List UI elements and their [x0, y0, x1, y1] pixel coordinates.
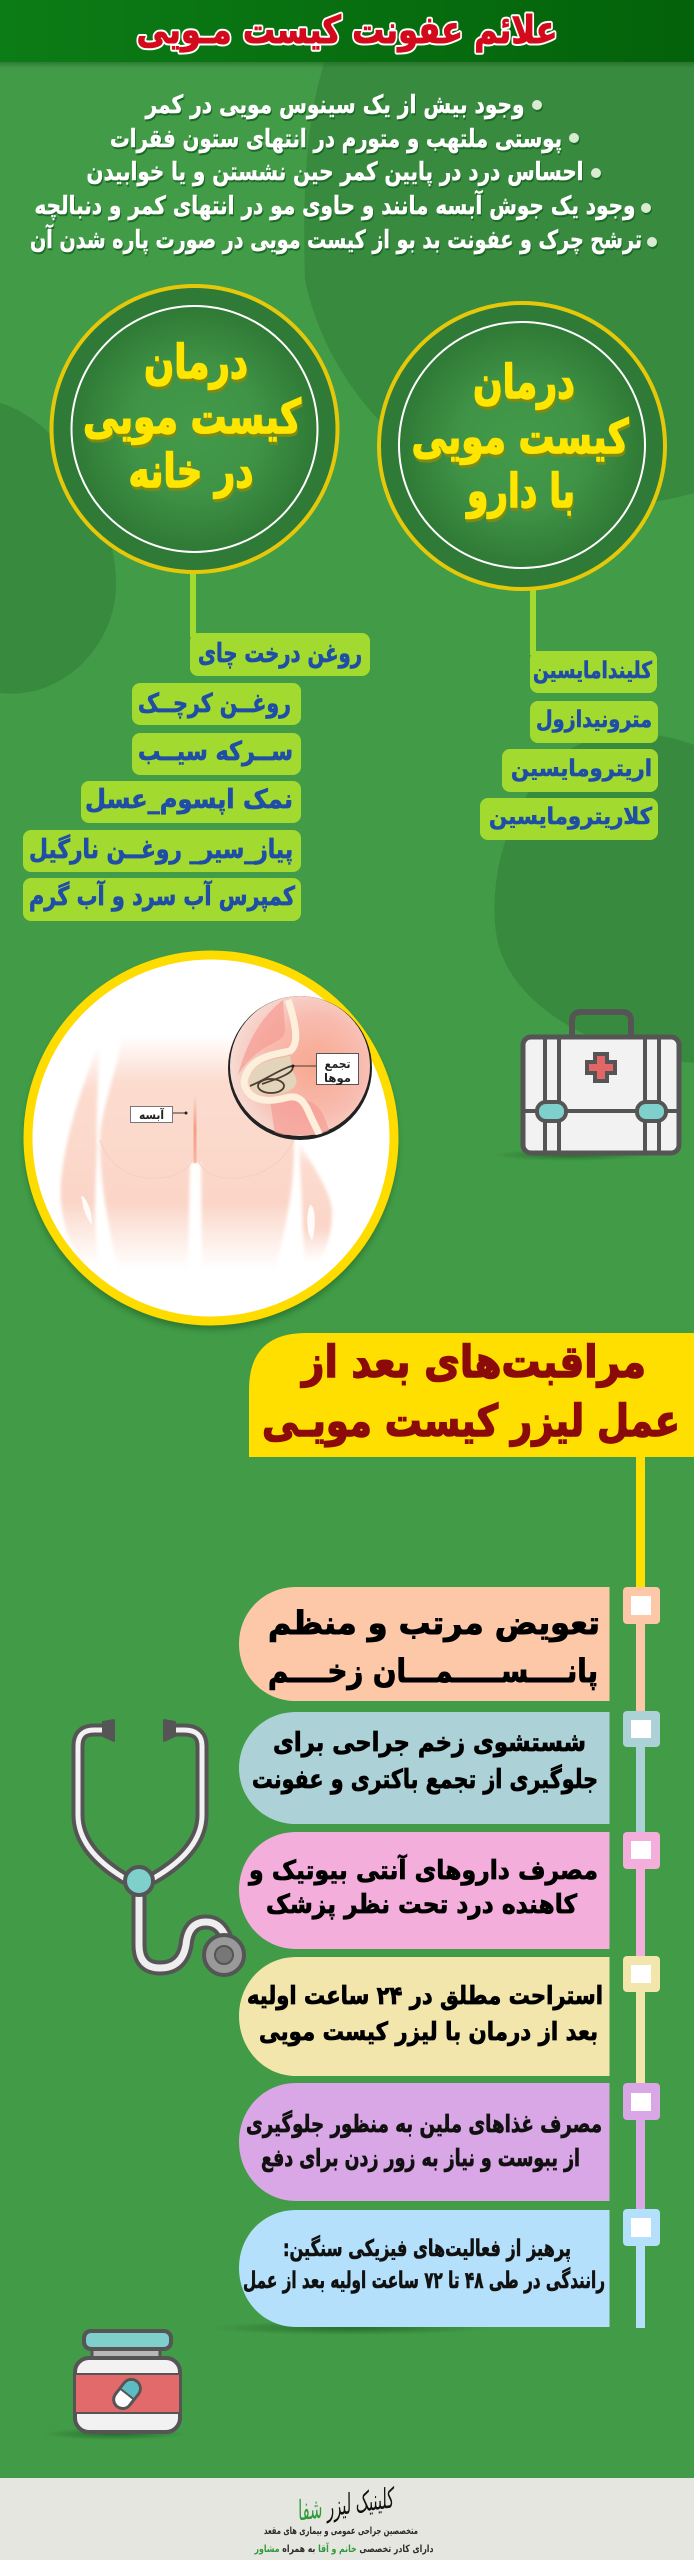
circle: home treatment: در خانه — [128, 444, 254, 499]
icon: pill bottle — [43, 2331, 187, 2440]
symptom 1: وجود بیش از یک سینوس مویی در کمر — [144, 90, 524, 120]
home remedies list: ســرکه سیــب — [138, 737, 293, 767]
drug list — [480, 651, 658, 840]
title: علائم عفونت کیست مـویی — [136, 8, 558, 53]
symptoms list — [30, 90, 657, 255]
heading banner: aftercare — [249, 1333, 694, 1457]
footer — [0, 2478, 694, 2560]
home remedies list: روغن درخت چای — [198, 639, 362, 669]
circle: drug treatment: درمان — [473, 355, 575, 410]
home remedies list — [23, 633, 370, 921]
card 2: جلوگیری از تجمع باکتری و عفونت — [252, 1764, 598, 1795]
card 1 — [239, 1587, 660, 1715]
card 4: استراحت مطلق در ۲۴ ساعت اولیه — [247, 1981, 603, 2011]
magnifier inset — [228, 996, 372, 1140]
card 1: تعویض مرتب و منظم — [268, 1604, 600, 1642]
card 5 — [239, 2083, 660, 2212]
label: abscess — [130, 1106, 188, 1122]
icon: medical case — [492, 1012, 679, 1161]
home remedies list: نمک اپسوم_عسل — [85, 785, 293, 815]
circle: home treatment: کیست مویی — [83, 390, 302, 445]
subtitle: متخصصین جراحی عمومی و بیماری های مقعد — [264, 2526, 418, 2537]
home remedies list: پیاز_سیر_ روغــن نارگیل — [29, 834, 293, 865]
header band — [0, 0, 694, 68]
heading banner: aftercare: مراقبت‌های بعد از — [300, 1337, 646, 1388]
circle: home treatment: درمان — [144, 335, 248, 390]
symptom 2: پوستی ملتهب و متورم در انتهای ستون فقرات — [110, 124, 562, 154]
card 3 — [239, 1832, 660, 1959]
home remedies list: کمپرس آب سرد و آب گرم — [29, 880, 296, 912]
label: abscess: آبسه — [139, 1107, 165, 1122]
drug list: اریترومایسین — [511, 756, 652, 782]
circle: drug treatment: با دارو — [466, 464, 575, 519]
card 6: رانندگی در طی ۴۸ تا ۷۲ ساعت اولیه بعد از عمل — [243, 2267, 605, 2294]
card 1: پانــــســـــمـــان زخــــم — [268, 1652, 598, 1690]
card 2: شستشوی زخم جراحی برای — [273, 1728, 586, 1758]
drug list: کلیندامایسین — [533, 658, 652, 684]
staff note: دارای کادر تخصصی خانم و آقا به همراه مشاور — [254, 2542, 434, 2555]
card 4 — [239, 1956, 660, 2085]
label: hair cluster: تجمع — [324, 1057, 350, 1071]
timeline line top — [636, 1457, 645, 1589]
title: علائم عفونت کیست مـویی — [136, 8, 558, 53]
icon: stethoscope — [78, 1720, 244, 1975]
circle: home treatment — [52, 286, 338, 572]
card 4: بعد از درمان با لیزر کیست مویی — [259, 2017, 598, 2047]
card 5: از یبوست و نیاز به زور زدن برای دفع — [261, 2144, 580, 2172]
anatomy illustration — [24, 955, 398, 1330]
drug list: کلاریترومایسین — [489, 804, 653, 830]
body — [61, 1035, 332, 1270]
home remedies list: روغــن کرچــک — [138, 689, 291, 719]
drug list: مترونیدازول — [536, 707, 652, 733]
card 6: پرهیز از فعالیت‌های فیزیکی سنگین: — [283, 2235, 571, 2262]
card 6 — [210, 2209, 660, 2335]
card 2 — [239, 1711, 660, 1835]
card 3: کاهنده درد تحت نظر پزشک — [266, 1890, 578, 1920]
card 3: مصرف داروهای آنتی بیوتیک و — [247, 1854, 598, 1886]
logo: کلینیک لیزر شفا — [295, 2481, 398, 2528]
label: hair cluster — [316, 1054, 358, 1086]
label: hair cluster: موها — [324, 1071, 351, 1086]
circle: drug treatment — [379, 303, 665, 589]
symptom 3: احساس درد در پایین کمر حین نشستن و یا خوابیدن — [86, 157, 584, 187]
connector lines — [190, 572, 536, 655]
circle: drug treatment: کیست مویی — [412, 410, 629, 465]
